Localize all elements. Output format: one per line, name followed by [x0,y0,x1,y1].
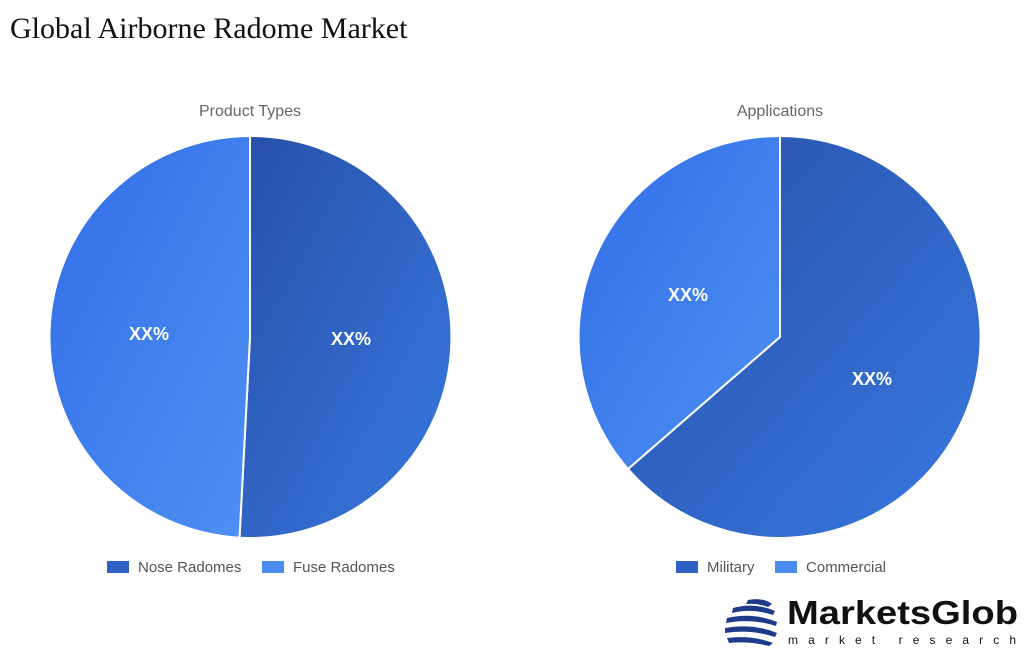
pie: applications: XX% [668,285,708,305]
slice: nose radomes [240,136,451,538]
pie: applications: Applications [737,103,823,120]
title: Global Airborne Radome Market [10,12,407,45]
legend: product types: Nose Radomes [138,559,241,576]
legend: product types: Fuse Radomes [293,559,395,576]
legend: applications: Military [707,559,755,576]
pie: applications: XX% [852,369,892,389]
legend: applications [676,559,886,576]
legend: applications: Commercial [806,559,886,576]
pie: product types: XX% [129,324,169,344]
slice: military [628,136,981,538]
charts: market research [788,633,1016,647]
pie: product types [49,103,451,538]
pie: product types: Product Types [199,103,301,120]
pie: applications [579,103,981,538]
pie: product types: XX% [331,329,371,349]
logo icon: globe [725,599,777,646]
legend: product types [107,559,395,576]
slice: fuse radomes [49,136,250,538]
slice: commercial [579,136,780,469]
logo text: MarketsGlob [787,594,1018,631]
